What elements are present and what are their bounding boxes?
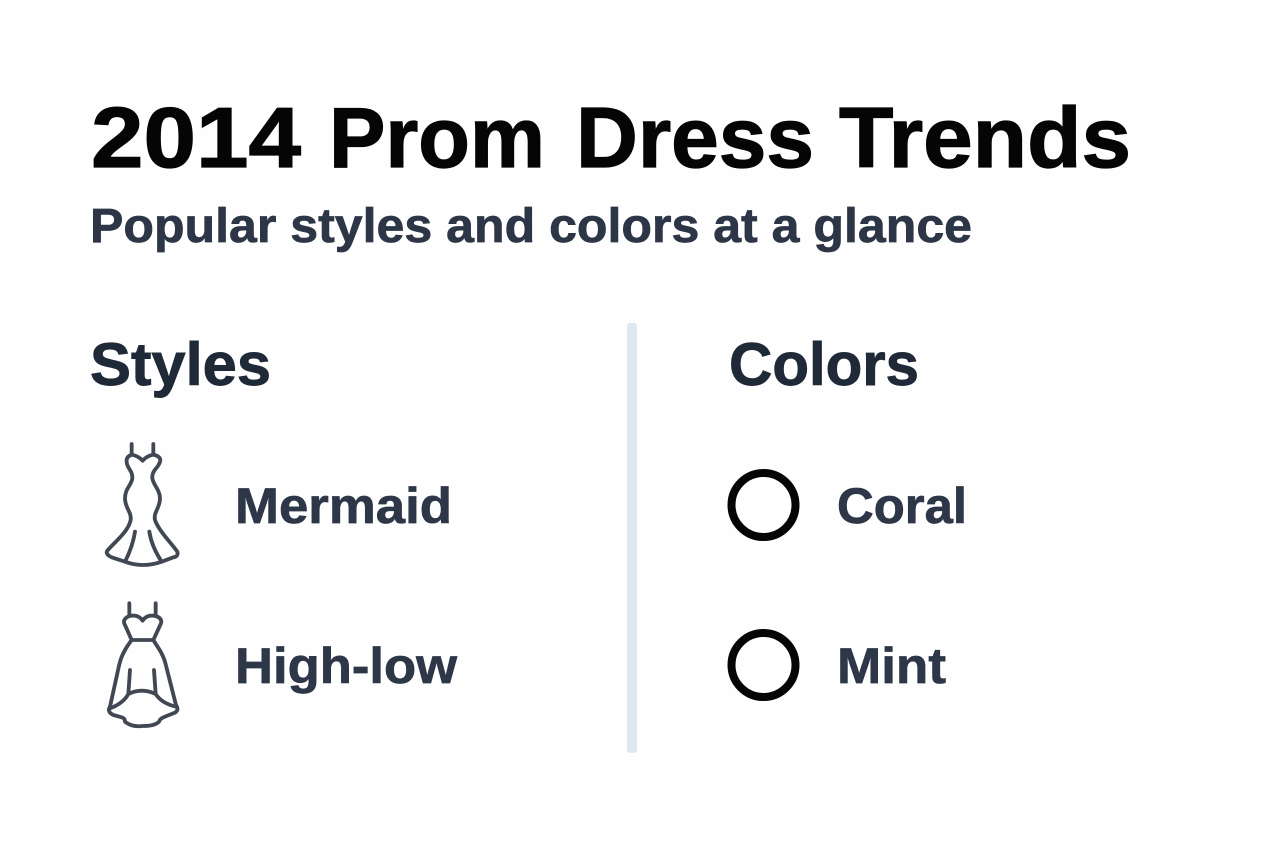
swatch: coral (732, 473, 796, 537)
heading: styles: Styles (90, 331, 271, 398)
title: Prom (329, 91, 545, 186)
title: Trends (839, 91, 1131, 186)
label: high-low: High-low (235, 638, 457, 694)
swatch: mint (732, 633, 796, 697)
icon: mermaid dress (107, 444, 178, 565)
icon: high-low dress (109, 603, 177, 726)
label: mermaid: Mermaid (235, 478, 452, 534)
title (91, 91, 1131, 186)
panel: styles (90, 331, 457, 726)
panel: colors (729, 331, 967, 697)
divider (627, 323, 637, 753)
title: Dress (576, 91, 814, 186)
title: 2014 (91, 91, 301, 186)
label: coral: Coral (837, 478, 967, 534)
label: mint: Mint (837, 638, 946, 694)
subtitle: Popular styles and colors at a glance (90, 200, 972, 253)
heading: colors: Colors (729, 331, 919, 398)
